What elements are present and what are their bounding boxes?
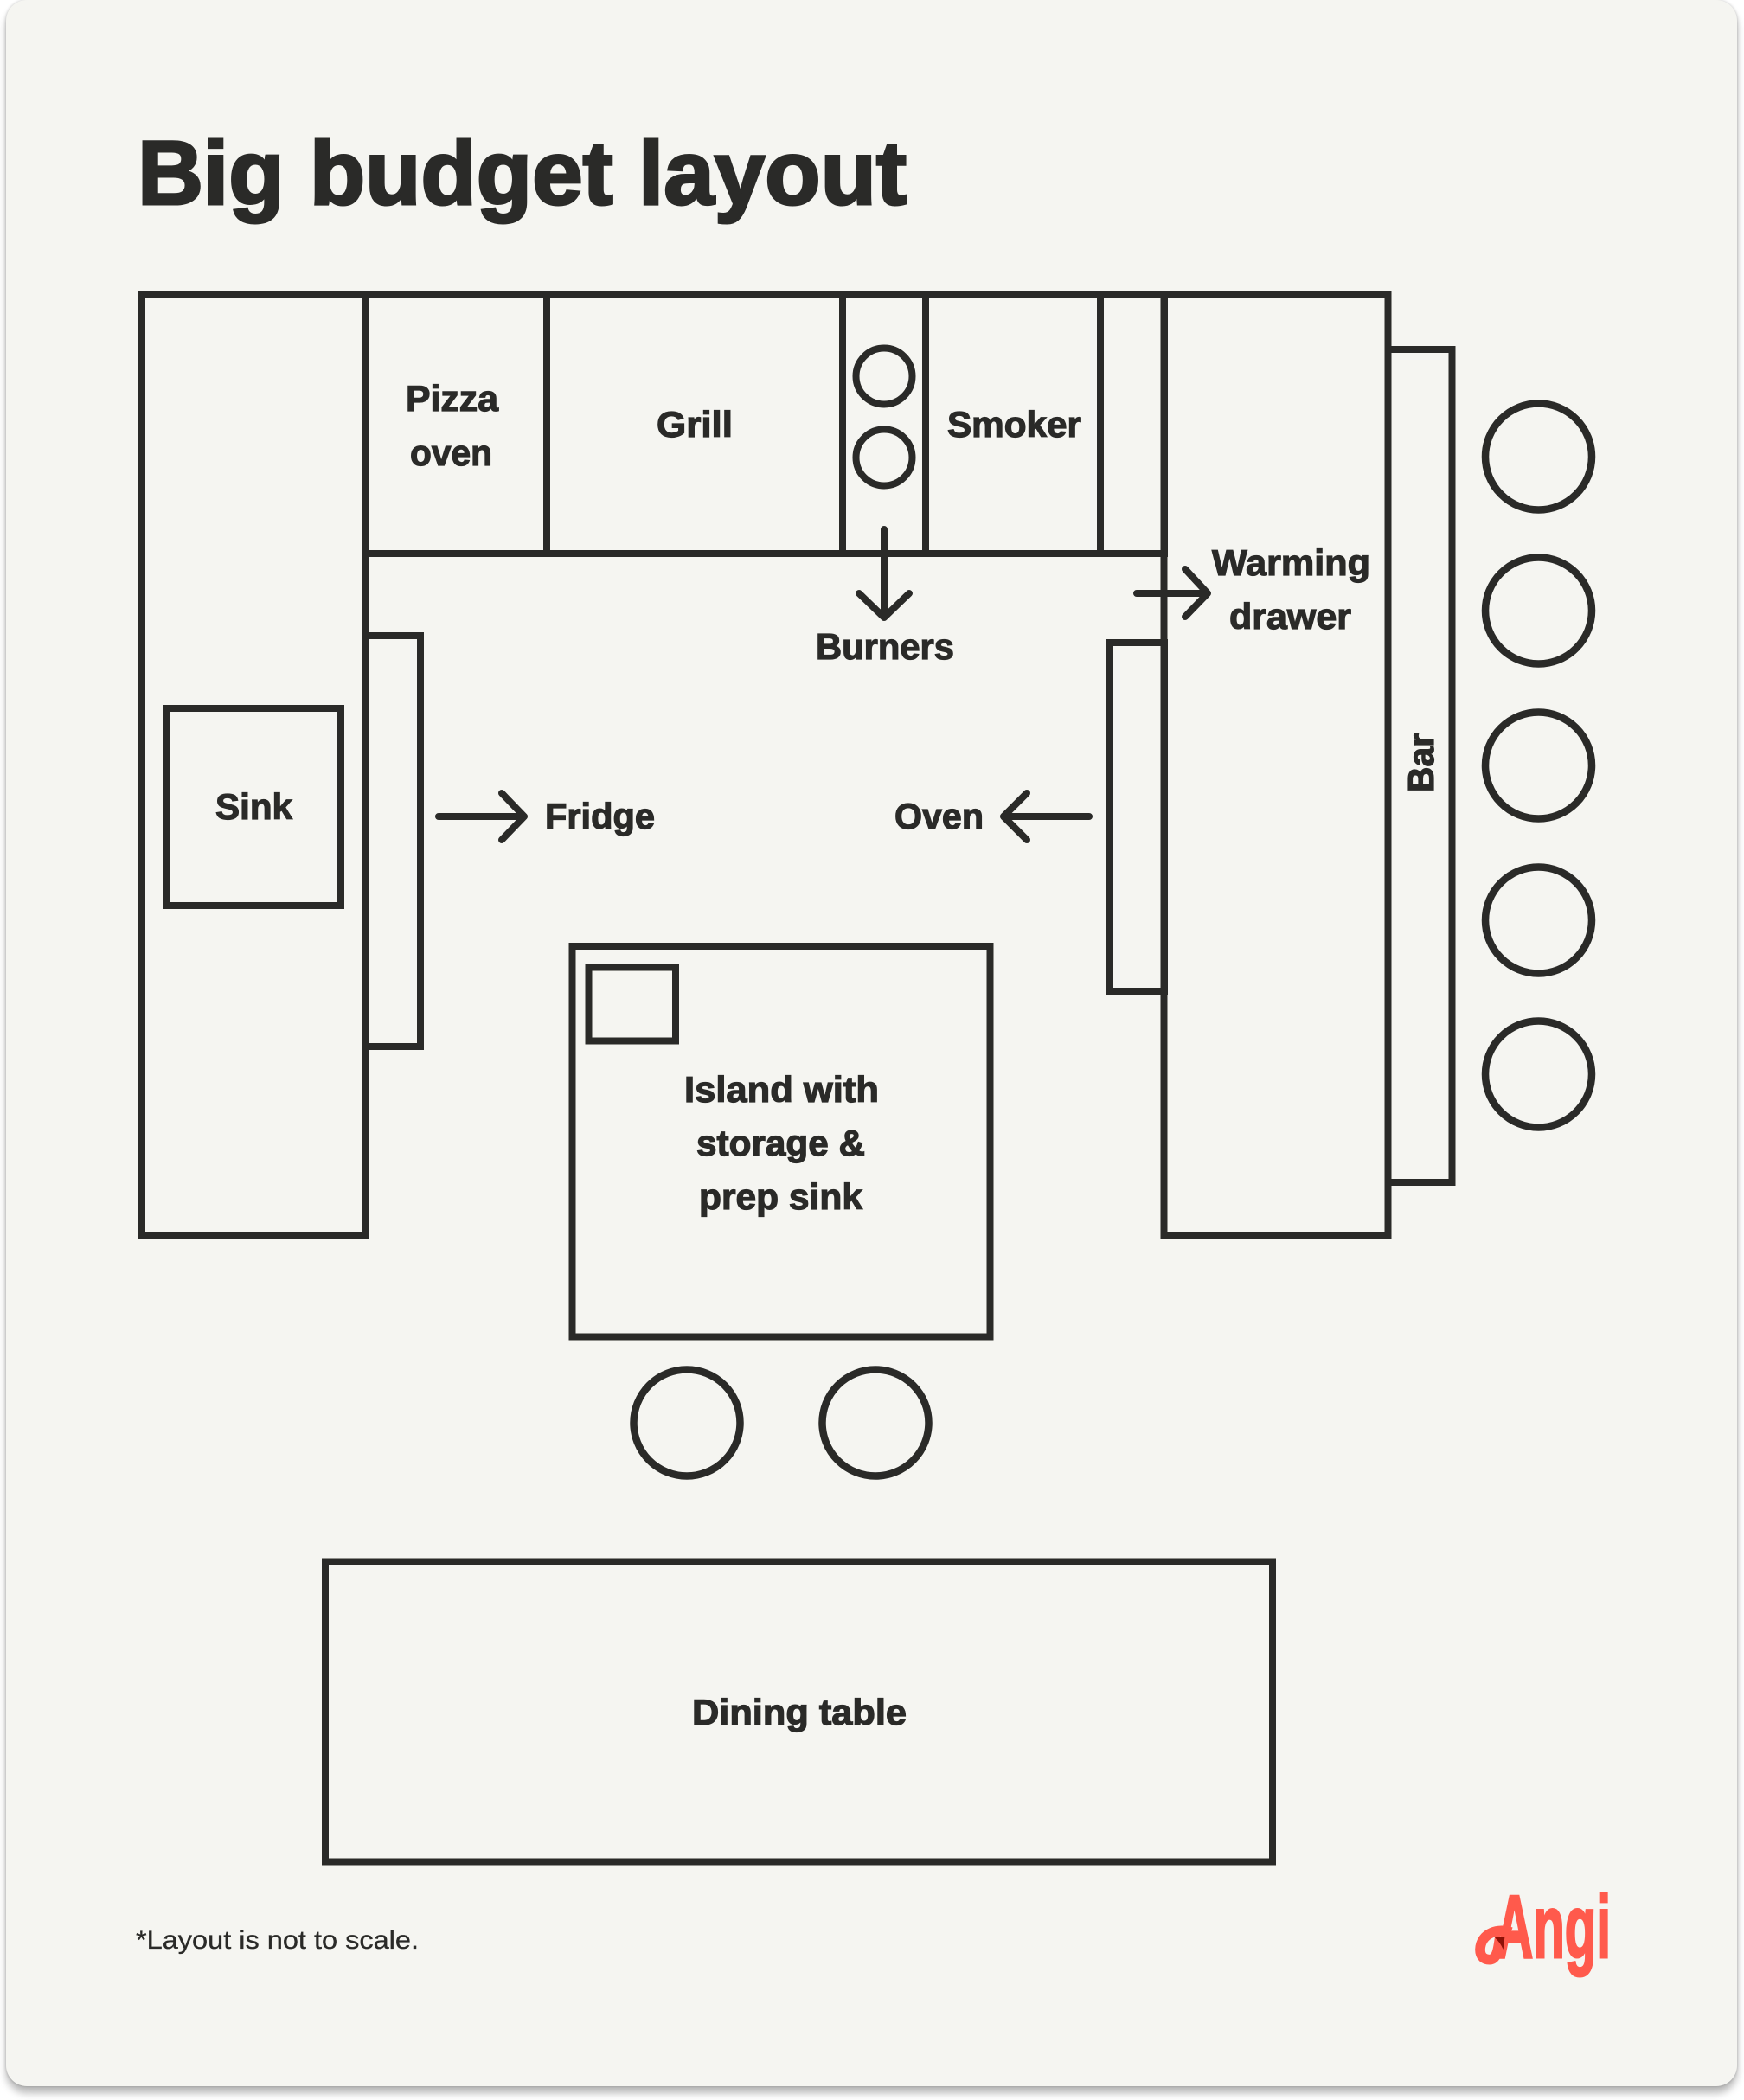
back counter bbox=[366, 295, 1164, 554]
sink bbox=[167, 708, 341, 906]
island: prep sink bbox=[699, 1176, 863, 1217]
pizza oven bbox=[406, 295, 547, 554]
logo: Angi: Angi bbox=[1496, 1877, 1611, 1976]
right counter bbox=[1164, 295, 1388, 1236]
arrow: burners bbox=[859, 529, 909, 618]
arrow: oven bbox=[1003, 793, 1089, 840]
oven unit bbox=[1110, 643, 1164, 991]
dining table: Dining table bbox=[692, 1692, 907, 1732]
fridge unit bbox=[366, 636, 420, 1047]
label: oven: Oven bbox=[894, 796, 984, 836]
arrow: warming drawer bbox=[1137, 569, 1208, 617]
label: fridge: Fridge bbox=[545, 796, 655, 836]
burners bbox=[856, 295, 926, 554]
pizza oven: oven bbox=[410, 432, 492, 473]
dining table bbox=[325, 1562, 1273, 1861]
grill: Grill bbox=[657, 404, 733, 445]
smoker: Smoker bbox=[947, 404, 1081, 445]
label: warming drawer: drawer bbox=[1229, 596, 1351, 637]
panel: kitchen floor plan bbox=[142, 295, 1592, 1861]
title: Big budget layout bbox=[138, 123, 907, 224]
island stools bbox=[633, 1370, 929, 1476]
footnote: *Layout is not to scale. bbox=[136, 1926, 419, 1955]
pizza oven: Pizza bbox=[406, 378, 499, 419]
bar bbox=[1388, 349, 1452, 1182]
bar stools bbox=[1485, 403, 1592, 1128]
bar: Bar bbox=[1401, 733, 1441, 792]
sink: Sink bbox=[215, 786, 293, 827]
arrow: fridge bbox=[439, 793, 524, 840]
island bbox=[573, 946, 990, 1337]
logo: Angi bbox=[1480, 1877, 1611, 1976]
label: warming drawer: Warming bbox=[1212, 542, 1370, 583]
island: Island with bbox=[684, 1069, 879, 1110]
label: burners: Burners bbox=[816, 626, 954, 667]
island: storage & bbox=[696, 1123, 865, 1163]
left counter bbox=[142, 295, 366, 1236]
label: warming drawer bbox=[1212, 542, 1370, 637]
